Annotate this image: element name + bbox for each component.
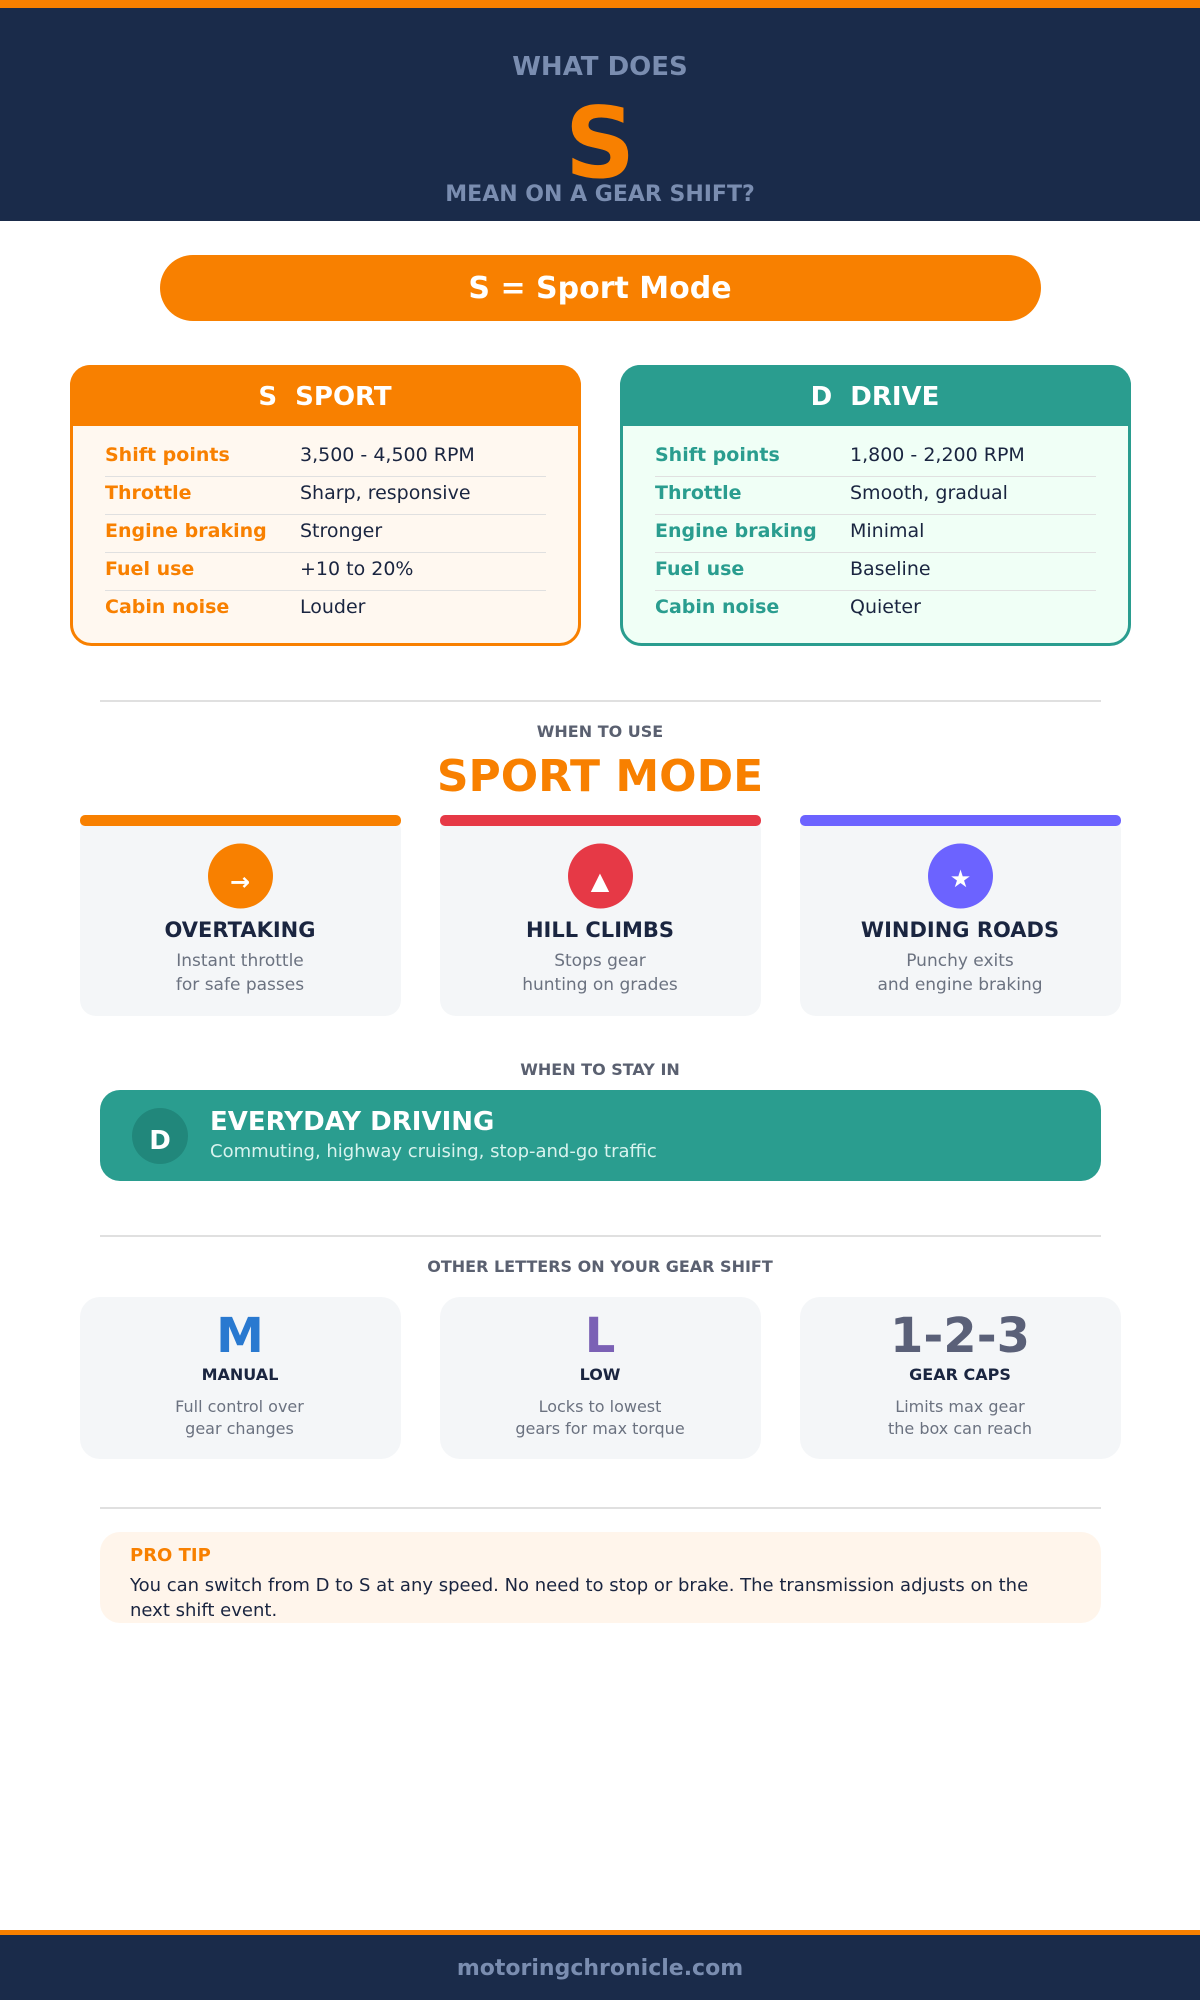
panel: low: LOW bbox=[580, 1365, 621, 1384]
panel: gear caps: 1-2-3 bbox=[890, 1308, 1030, 1364]
panel: winding roads: and engine braking bbox=[877, 975, 1043, 995]
panel: overtaking bbox=[80, 815, 401, 1016]
panel: sport comparison: +10 to 20% bbox=[300, 558, 413, 580]
panel: sport comparison: Engine braking bbox=[105, 520, 267, 542]
panel: manual: Full control over bbox=[175, 1397, 304, 1416]
panel: hill climbs: Stops gear bbox=[554, 951, 646, 971]
icon: triangle bbox=[568, 844, 633, 908]
panel: winding roads bbox=[800, 815, 1121, 1016]
callout: pro tip: next shift event. bbox=[130, 1600, 277, 1621]
heading: when to use: WHEN TO USE bbox=[537, 722, 663, 741]
title: what does: WHAT DOES bbox=[512, 52, 688, 82]
panel: drive comparison: Quieter bbox=[850, 596, 921, 618]
panel: drive comparison: Smooth, gradual bbox=[850, 482, 1008, 504]
panel: sport comparison: Stronger bbox=[300, 520, 382, 542]
panel: everyday driving: EVERYDAY DRIVING bbox=[210, 1107, 494, 1137]
panel: overtaking: OVERTAKING bbox=[165, 918, 315, 942]
title: big S: S bbox=[565, 87, 635, 201]
answer pill: S = Sport Mode bbox=[468, 271, 732, 306]
panel: sport comparison: 3,500 - 4,500 RPM bbox=[300, 444, 475, 466]
panel: gear caps bbox=[800, 1297, 1121, 1459]
icon: star bbox=[928, 844, 993, 908]
panel: manual: MANUAL bbox=[202, 1365, 278, 1384]
panel: drive comparison: Baseline bbox=[850, 558, 931, 580]
panel: drive comparison: Shift points bbox=[655, 444, 780, 466]
panel: sport comparison: Fuel use bbox=[105, 558, 194, 580]
panel: sport comparison: Sharp, responsive bbox=[300, 482, 471, 504]
panel: gear caps: GEAR CAPS bbox=[909, 1365, 1011, 1384]
panel: manual: gear changes bbox=[185, 1419, 294, 1438]
panel: sport comparison: S SPORT bbox=[258, 382, 392, 412]
panel: drive comparison: Minimal bbox=[850, 520, 924, 542]
callout: pro tip: PRO TIP bbox=[130, 1545, 211, 1566]
panel: drive comparison: Cabin noise bbox=[655, 596, 779, 618]
panel: drive comparison: D DRIVE bbox=[811, 382, 939, 412]
panel: hill climbs: hunting on grades bbox=[522, 975, 678, 995]
panel: manual: M bbox=[216, 1308, 264, 1364]
callout: pro tip bbox=[100, 1532, 1101, 1623]
footer bbox=[0, 1930, 1200, 2000]
panel: hill climbs bbox=[440, 815, 761, 1016]
panel: hill climbs: HILL CLIMBS bbox=[526, 918, 674, 942]
heading: sport mode: SPORT MODE bbox=[437, 751, 763, 802]
answer pill bbox=[160, 255, 1041, 321]
panel: sport comparison: Cabin noise bbox=[105, 596, 229, 618]
panel: drive comparison: Fuel use bbox=[655, 558, 744, 580]
heading: other letters: OTHER LETTERS ON YOUR GEAR SHIFT bbox=[427, 1257, 773, 1276]
panel: overtaking: Instant throttle bbox=[176, 951, 304, 971]
panel: low: L bbox=[585, 1308, 615, 1364]
panel: everyday driving bbox=[100, 1090, 1101, 1181]
header banner bbox=[0, 0, 1200, 221]
panel: drive comparison bbox=[620, 365, 1131, 644]
panel: low: Locks to lowest bbox=[539, 1397, 661, 1416]
icon: arrow bbox=[208, 844, 273, 908]
panel: low bbox=[440, 1297, 761, 1459]
icon: arrow: → bbox=[230, 868, 250, 896]
panel: gear caps: Limits max gear bbox=[895, 1397, 1025, 1416]
icon: triangle: ▲ bbox=[591, 867, 610, 895]
callout: pro tip: You can switch from D to S at any speed. No need to stop or brake. The transmission adjusts on the bbox=[129, 1575, 1028, 1596]
heading: when to stay in: WHEN TO STAY IN bbox=[520, 1060, 680, 1079]
panel: drive comparison: Throttle bbox=[655, 482, 741, 504]
panel: everyday driving: Commuting, highway cruising, stop-and-go traffic bbox=[210, 1141, 657, 1162]
panel: overtaking: for safe passes bbox=[176, 975, 304, 995]
title: mean on a gear shift: MEAN ON A GEAR SHIFT? bbox=[445, 182, 755, 207]
panel: sport comparison bbox=[70, 365, 581, 644]
panel: drive comparison: 1,800 - 2,200 RPM bbox=[850, 444, 1025, 466]
panel: winding roads: Punchy exits bbox=[906, 951, 1014, 971]
panel: winding roads: WINDING ROADS bbox=[861, 918, 1059, 942]
panel: sport comparison: Louder bbox=[300, 596, 366, 618]
icon: D badge bbox=[132, 1108, 188, 1164]
panel: sport comparison: Shift points bbox=[105, 444, 230, 466]
icon: star: ★ bbox=[950, 865, 971, 893]
panel: low: gears for max torque bbox=[515, 1419, 685, 1438]
icon: D badge: D bbox=[149, 1126, 171, 1156]
panel: sport comparison: Throttle bbox=[105, 482, 191, 504]
footer: motoringchronicle.com bbox=[457, 1956, 743, 1981]
panel: drive comparison: Engine braking bbox=[655, 520, 817, 542]
panel: manual bbox=[80, 1297, 401, 1459]
panel: gear caps: the box can reach bbox=[888, 1419, 1032, 1438]
